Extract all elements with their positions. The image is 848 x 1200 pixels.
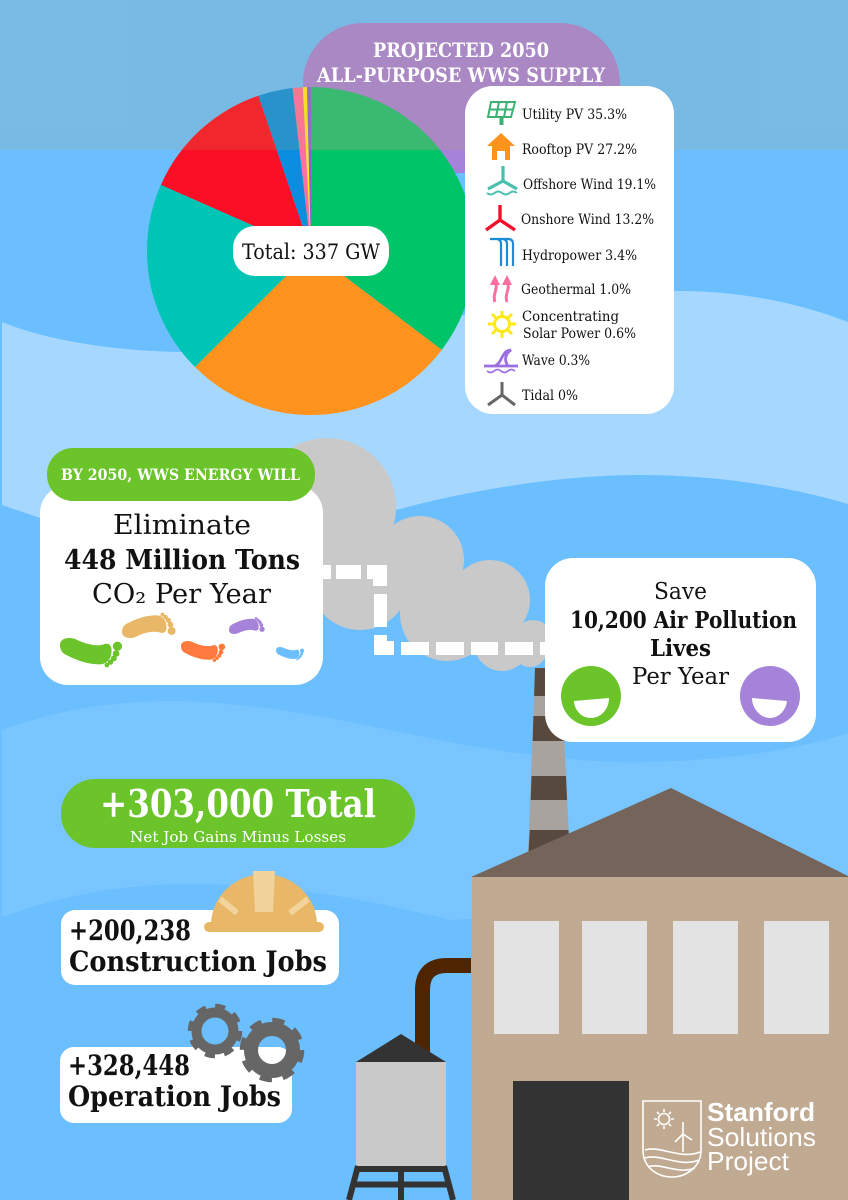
icon: green smiley [561, 666, 621, 726]
logo text: Stanford [707, 1097, 815, 1127]
legend label: wave: Wave 0.3% [522, 353, 590, 369]
water tank [349, 1034, 453, 1200]
jobs total pill: Net Job Gains Minus Losses [130, 828, 346, 846]
title text [316, 38, 606, 87]
legend label: tidal: Tidal 0% [522, 388, 578, 404]
panel: operation jobs: +328,448 [68, 1049, 190, 1082]
panel: construction jobs: Construction Jobs [69, 945, 327, 978]
title text: PROJECTED 2050 [373, 38, 549, 62]
legend label: onshore wind: Onshore Wind 13.2% [521, 212, 654, 228]
roof [471, 788, 848, 877]
save text: Save [654, 579, 707, 605]
icon: hydropower [490, 239, 513, 266]
dashed path [323, 565, 546, 655]
logo shield [643, 1101, 701, 1177]
icon: purple smiley [740, 666, 800, 726]
eliminate text: Eliminate [113, 510, 251, 541]
pie chart [147, 87, 475, 415]
pie total label [233, 226, 389, 276]
icon: offshore wind [487, 166, 517, 194]
title pill [303, 23, 620, 173]
save text [570, 579, 797, 690]
legend label: rooftop PV: Rooftop PV 27.2% [522, 142, 637, 158]
icon: wave [484, 350, 518, 372]
save text: Per Year [632, 664, 729, 690]
icon: footprints [60, 613, 304, 667]
legend label: concentrating solar power [522, 309, 636, 342]
eliminate text: 448 Million Tons [64, 545, 300, 576]
door [513, 1081, 629, 1200]
icon: onshore wind [486, 205, 515, 230]
panel: save lives [545, 558, 816, 742]
panel: construction jobs: +200,238 [69, 914, 191, 947]
icon: tidal [488, 382, 515, 405]
jobs total pill: +303,000 Total [100, 781, 376, 826]
logo text: Project [707, 1146, 790, 1176]
legend label: geothermal: Geothermal 1.0% [521, 282, 631, 298]
icon: sun [488, 311, 516, 338]
icon: solar panel [488, 102, 515, 125]
panel: operation jobs: Operation Jobs [68, 1080, 281, 1113]
chimney [528, 668, 570, 860]
top tinted band [0, 0, 848, 150]
save text: Lives [650, 635, 711, 662]
legend label: utility PV: Utility PV 35.3% [522, 107, 627, 123]
title text: ALL-PURPOSE WWS SUPPLY [316, 63, 606, 87]
pie green tint [311, 87, 440, 150]
legend label: offshore wind: Offshore Wind 19.1% [523, 177, 656, 193]
heading pill [47, 448, 315, 501]
legend label: concentrating solar power: Solar Power 0.6% [523, 326, 636, 342]
eliminate text [64, 510, 300, 610]
pipe [422, 966, 471, 1058]
icon: gears [190, 1006, 301, 1079]
pie total label: Total: 337 GW [242, 240, 380, 264]
jobs total pill [61, 779, 415, 848]
heading pill: BY 2050, WWS ENERGY WILL [61, 465, 300, 484]
legend label: hydropower: Hydropower 3.4% [522, 248, 637, 264]
panel: eliminate CO2 [40, 448, 323, 685]
legend panel [465, 86, 674, 414]
logo text [707, 1097, 816, 1176]
legend label: concentrating solar power: Concentrating [522, 309, 619, 325]
windows [494, 921, 829, 1034]
logo text: Solutions [707, 1122, 816, 1152]
icon: house [487, 133, 515, 160]
smoke cloud [258, 438, 553, 671]
logo [643, 1097, 816, 1177]
eliminate text: CO₂ Per Year [92, 579, 271, 610]
icon: hard hat [204, 871, 324, 932]
panel: operation jobs [60, 1006, 301, 1123]
icon: geothermal [490, 275, 512, 302]
save text: 10,200 Air Pollution [570, 607, 797, 634]
panel: construction jobs [61, 871, 339, 985]
factory building [471, 788, 848, 1200]
